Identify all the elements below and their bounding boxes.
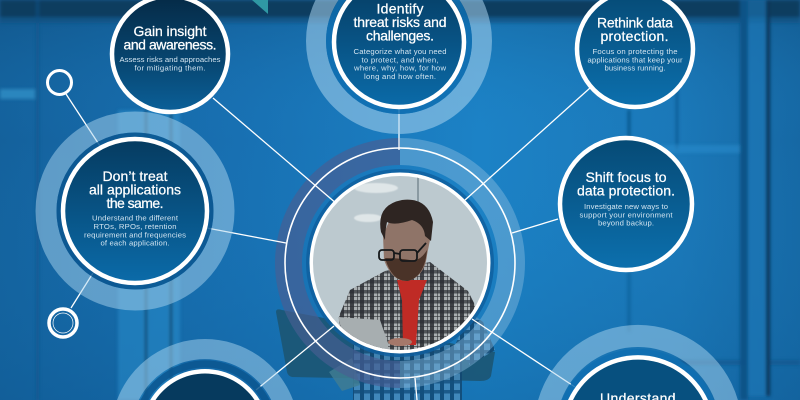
heading [354,0,446,44]
heading: Gain insight [134,23,207,39]
body text [120,55,221,72]
body text: Categorize what you need [354,47,446,56]
laptop [338,317,388,350]
beard [385,250,427,281]
body text: to protect, and when, [362,56,438,64]
red tee [397,280,427,345]
shirt [339,262,475,350]
body text: business running. [604,64,666,72]
heading: protection. [600,28,668,44]
inner blue ring [562,349,714,400]
connector lines [66,88,590,400]
hair [380,200,433,241]
heading: the same. [106,195,164,211]
body text: for mitigating them. [134,64,206,72]
heading: Don’t treat [102,168,168,184]
body text [353,47,446,81]
heading [89,168,181,211]
heading: and awareness. [124,36,216,52]
heading: Shift focus to [586,169,667,185]
hand [329,358,360,391]
body text: applications that keep your [588,56,683,64]
heading: Rethink data [597,14,673,30]
body text: of each application. [100,238,170,248]
body text: beyond backup. [598,218,654,228]
body text: where, why, how, for how [353,64,446,72]
panel: Identify threat risks and challenges [316,0,482,124]
circle fill [573,360,703,400]
body text: long and how often. [364,72,436,81]
hand [388,338,412,346]
body text: support your environment [580,210,673,220]
glasses [379,243,426,261]
right sleeve [455,312,495,365]
inner dark ring [140,360,270,400]
body text [84,214,186,248]
shirt lower [353,345,462,400]
person below the central circle [276,309,495,400]
heading: all applications [89,182,181,198]
ring [538,325,738,400]
heading [577,169,675,198]
body text: Focus on protecting the [592,47,678,56]
ring [316,0,482,124]
body text [580,202,673,228]
heading: data protection. [577,182,675,198]
circle fill [156,374,254,400]
body text [588,47,683,72]
photo: man with laptop [310,170,490,360]
panel: Shift focus to data protection [560,138,692,270]
white border [150,369,260,400]
ring [46,122,224,300]
body text: Investigate new ways to [584,202,668,211]
heading: challenges. [366,28,434,44]
ring [117,339,293,400]
body text: requirement and frequencies [84,230,186,240]
panel: Gain insight and awareness [112,0,228,112]
laptop back [276,309,495,381]
heading [124,23,216,52]
white border [568,355,708,400]
panel: central circle rings [275,138,525,388]
heading [597,14,673,44]
heading: Identify [376,0,424,16]
icon: small ring bottom left [49,309,77,337]
body text: Assess risks and approaches [120,55,221,64]
body text: Understand the different [92,214,179,222]
icon: small ring top left [48,70,72,94]
panel: Rethink data protection [577,0,693,107]
heading: threat risks and [354,14,446,30]
panel: Don't treat all applications the same [46,122,224,300]
panel: Understand [538,325,738,400]
body text: RTOs, RPOs, retention [94,222,176,231]
panel: bottom left circle [117,339,293,400]
neck and face [383,215,431,281]
